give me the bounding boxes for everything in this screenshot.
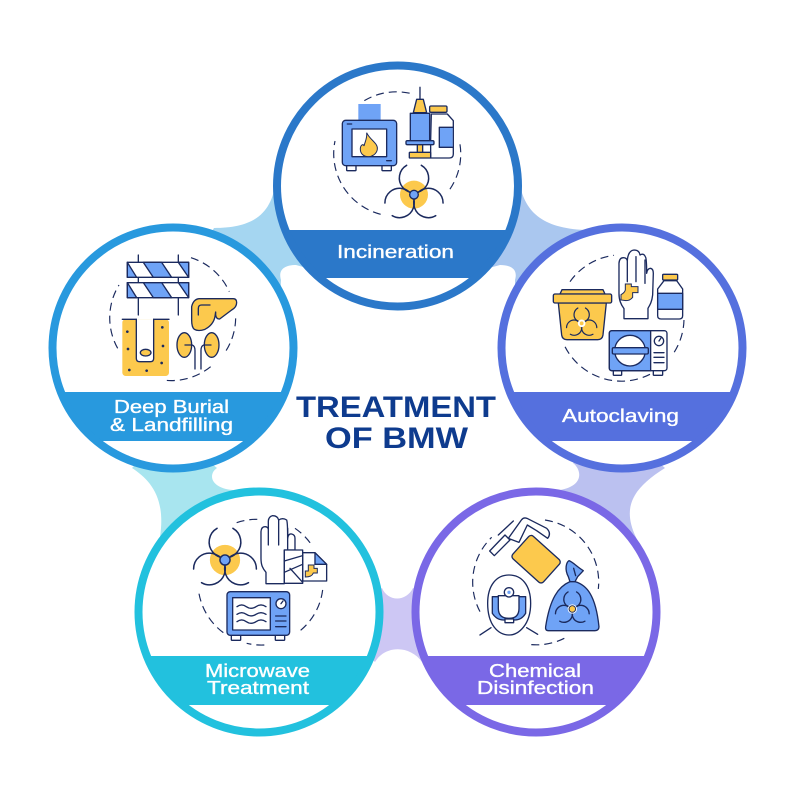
label band: incineration xyxy=(290,230,506,278)
icon group: incineration xyxy=(334,87,461,222)
label band: microwave xyxy=(151,656,367,705)
label: deep burial and landfilling: & Landfilling xyxy=(110,414,233,435)
label: deep burial and landfilling: Deep Burial xyxy=(114,396,229,417)
title: OF BMW xyxy=(325,422,469,455)
connector: autoclaving to chemical disinfection xyxy=(560,430,665,560)
title: TREATMENT xyxy=(296,391,496,424)
ring: deep burial xyxy=(52,228,294,468)
icon: autoclave machine xyxy=(609,331,667,375)
icon group: chemical disinfection xyxy=(473,518,599,645)
label: microwave treatment: Microwave xyxy=(205,660,310,681)
icon group: deep burial xyxy=(110,255,237,381)
ring: autoclaving xyxy=(502,228,742,468)
icon: microwave oven xyxy=(227,592,290,640)
connector: incineration to deep burial xyxy=(170,180,350,300)
icon: biohazard symbol xyxy=(381,165,447,222)
icon: burial pit xyxy=(122,319,169,376)
label band: chemical disinfection xyxy=(428,656,644,705)
icon: biohazard bag xyxy=(546,561,599,631)
label: chemical disinfection: Chemical xyxy=(489,660,581,681)
label band: autoclaving xyxy=(514,392,730,441)
icon: liver xyxy=(192,299,237,330)
icon group: autoclaving xyxy=(553,250,684,381)
icon: contaminated glove xyxy=(619,250,653,319)
label: incineration: Incineration xyxy=(337,241,454,262)
label band: deep burial xyxy=(65,392,281,441)
connector: microwave to chemical disinfection xyxy=(330,588,470,662)
panel: deep burial and landfilling xyxy=(45,228,300,468)
label: microwave treatment: Treatment xyxy=(207,677,309,698)
icon: spray bottle xyxy=(490,518,562,584)
icon group: microwave xyxy=(190,516,327,645)
connector: deep burial to microwave xyxy=(132,430,233,560)
icon: vial xyxy=(658,274,683,319)
ring: microwave xyxy=(138,492,380,732)
panel: autoclaving xyxy=(495,228,750,468)
label: autoclaving: Autoclaving xyxy=(562,405,679,426)
icon: glove and bandage xyxy=(261,516,327,584)
ring: incineration xyxy=(277,66,518,306)
icon: road barrier xyxy=(127,255,189,315)
icon: biohazard bin xyxy=(553,290,612,340)
connector: incineration to autoclaving xyxy=(445,180,625,300)
icon: protective mask xyxy=(480,575,538,635)
icon: biohazard symbol xyxy=(190,528,260,590)
label: chemical disinfection: Disinfection xyxy=(477,677,594,698)
icon: incinerator xyxy=(342,104,397,171)
panel: chemical disinfection xyxy=(410,492,665,732)
panel: incineration xyxy=(270,66,525,306)
ring: chemical disinfection xyxy=(416,492,656,732)
icon: kidneys xyxy=(177,333,219,369)
panel: microwave treatment xyxy=(130,492,385,732)
icon: syringe and vial xyxy=(406,87,453,158)
